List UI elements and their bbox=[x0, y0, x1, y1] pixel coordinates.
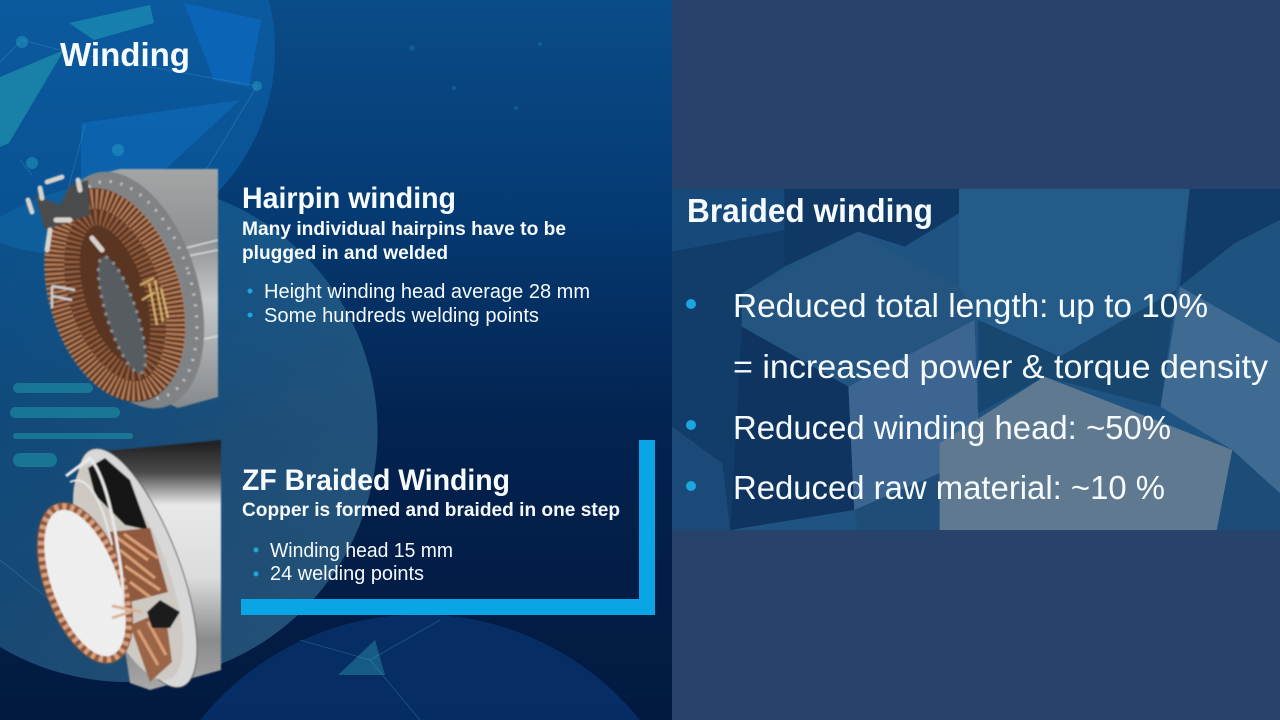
text block: ZF braided winding: 24 welding points bbox=[270, 563, 424, 585]
text block: hairpin winding: plugged in and welded bbox=[242, 243, 448, 264]
text block: hairpin winding: Some hundreds welding points bbox=[264, 305, 539, 327]
left background panel bbox=[0, 0, 672, 720]
text block: ZF braided winding: ZF Braided Winding bbox=[242, 464, 510, 497]
text block: hairpin winding bbox=[242, 182, 590, 327]
text block: hairpin winding: Height winding head average 28 mm bbox=[264, 281, 590, 303]
image: ZF braided winding stator bbox=[24, 434, 222, 702]
text block: hairpin winding: Hairpin winding bbox=[242, 182, 456, 215]
heading: braided winding: Braided winding bbox=[687, 192, 933, 229]
text block: ZF braided winding: Copper is formed and braided in one step bbox=[242, 500, 620, 521]
list: braided winding benefits: Reduced winding head: ~50% bbox=[733, 409, 1171, 446]
text block: hairpin winding: Many individual hairpins have to be bbox=[242, 219, 566, 240]
list: braided winding benefits: Reduced total length: up to 10% bbox=[733, 287, 1208, 324]
list: braided winding benefits bbox=[686, 287, 1269, 506]
text block: ZF braided winding bbox=[242, 464, 620, 585]
title: Winding bbox=[60, 36, 190, 73]
panel: braided winding background bbox=[672, 189, 1280, 530]
list: braided winding benefits: = increased power & torque density bbox=[733, 348, 1269, 385]
image: hairpin winding stator bbox=[21, 153, 231, 427]
list: braided winding benefits: Reduced raw material: ~10 % bbox=[733, 469, 1165, 506]
highlight bracket bbox=[241, 440, 655, 615]
text block: ZF braided winding: Winding head 15 mm bbox=[270, 540, 453, 562]
